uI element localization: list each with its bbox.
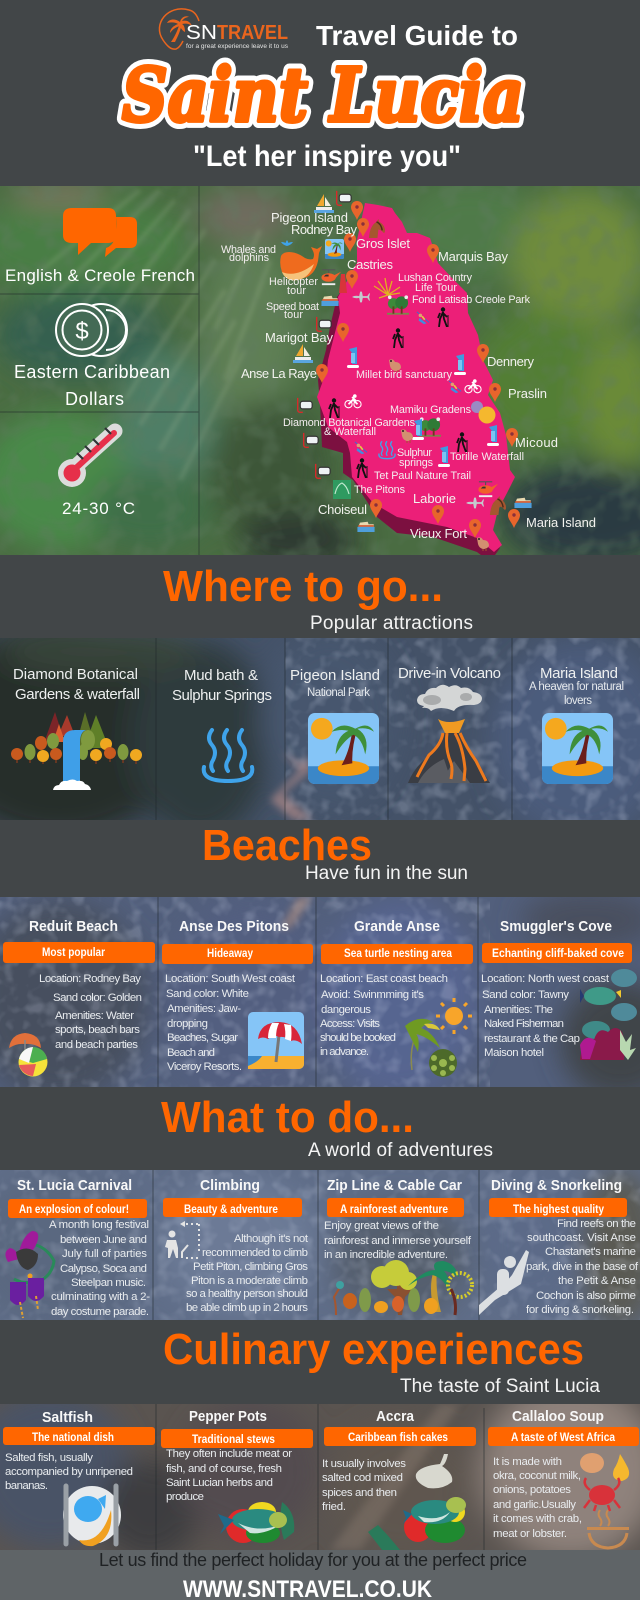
island of Saint Lucia	[317, 203, 515, 552]
attraction: Mud bath and Sulphur Springs: Sulphur Springs	[172, 687, 272, 704]
section heading: Beaches: Beaches	[202, 821, 372, 870]
map labels: Marquis Bay	[438, 249, 508, 264]
card: Grande Anse: Avoid: Swinmming it's	[321, 989, 424, 1001]
panel: beaches	[0, 890, 640, 1100]
card: Diving and Snorkeling: southcoast. Visit Anse	[527, 1232, 636, 1244]
photo background: water	[0, 638, 640, 820]
map labels: Fond Latisab Creole Park	[412, 294, 531, 306]
language fact	[5, 208, 195, 285]
icon: whale	[280, 240, 322, 280]
icon: sun, palm and turtle	[405, 998, 472, 1077]
map labels: Vieux Fort	[410, 526, 467, 541]
card: Climbing: Petit Piton, climbing Gros	[193, 1261, 308, 1273]
card: Reduit Beach: Amenities: Water	[55, 1010, 134, 1022]
card: Reduit Beach	[3, 918, 155, 1076]
map labels: Helicopter	[269, 276, 318, 288]
card: Diving and Snorkeling: the Petit & Anse	[558, 1275, 636, 1287]
card: Anse Des Pitons	[162, 918, 313, 1073]
map labels: Mamiku Gradens	[390, 404, 472, 416]
card: Accra	[322, 1408, 476, 1550]
temperature fact	[58, 428, 135, 518]
card: Climbing: Although it's not	[234, 1233, 309, 1245]
logo: SN Travel: for a great experience leave it to us	[186, 43, 289, 50]
icon: beach umbrella	[248, 1012, 304, 1069]
card: Reduit Beach: Sand color: Golden	[53, 992, 142, 1004]
icon: parasol and beach ball	[9, 1033, 48, 1076]
section heading: What to do	[161, 1093, 493, 1161]
currency fact: $	[75, 318, 89, 345]
card: Smuggler's Cove: restaurant & the Cap	[484, 1033, 580, 1045]
tagline: "Let her inspire you"	[193, 140, 461, 173]
card: Reduit Beach: sports, beach bars	[55, 1024, 140, 1036]
map pins	[316, 201, 520, 538]
card: Pepper Pots: produce	[166, 1491, 204, 1503]
card: Diving and Snorkeling: Cochon is also pirme	[536, 1290, 636, 1302]
icon: carnival masks	[5, 1231, 54, 1318]
card: Callaloo Soup: and garlic.Usually	[493, 1499, 576, 1511]
card: Pepper Pots: fish, and of course, fresh	[166, 1463, 282, 1475]
card: Diving and Snorkeling: park, dive in the base of	[526, 1261, 639, 1273]
key facts dividers	[0, 186, 199, 555]
map labels: dolphins	[229, 252, 270, 264]
card: Climbing	[163, 1177, 309, 1314]
logo: SN Travel	[159, 9, 289, 50]
card: Saltfish	[3, 1409, 155, 1546]
card: Pepper Pots: Traditional stews	[192, 1432, 275, 1446]
attraction: Pigeon Island: National Park	[307, 687, 370, 699]
card: Zip Line and Cable Car: rainforest and inmerse yourself	[324, 1235, 472, 1247]
card: Pepper Pots: They often include meat or	[166, 1448, 292, 1460]
card: St. Lucia Carnival: culminating with a 2-	[51, 1291, 150, 1303]
panel: culinary experiences	[0, 1380, 640, 1560]
icon: volcano	[408, 685, 490, 783]
map labels: springs	[399, 457, 434, 469]
card: St. Lucia Carnival: A month long festival	[49, 1219, 149, 1231]
card: Pepper Pots	[161, 1408, 313, 1543]
map labels: Dennery	[487, 354, 534, 369]
map labels: Millet bird sanctuary	[356, 369, 453, 381]
attraction: Pigeon Island	[290, 667, 380, 784]
card: Grande Anse	[320, 918, 473, 1077]
card: Zip Line and Cable Car: Enjoy great views of the	[324, 1220, 439, 1232]
card: St. Lucia Carnival: St. Lucia Carnival	[17, 1177, 132, 1194]
card: Anse Des Pitons: Amenities: Jaw-	[167, 1003, 241, 1015]
header	[122, 9, 524, 173]
map labels: Maria Island	[526, 515, 596, 530]
card: Reduit Beach: Most popular	[42, 945, 105, 959]
card: Anse Des Pitons: Hideaway	[207, 946, 253, 960]
map labels: & Waterfall	[324, 426, 376, 438]
section heading: Beaches: Have fun in the sun	[305, 863, 468, 884]
icon: the Pitons	[333, 480, 351, 499]
card: Grande Anse: in advance.	[320, 1046, 369, 1058]
map labels: Micoud	[515, 435, 558, 450]
card: Grande Anse: Access: Visits	[320, 1018, 380, 1030]
card: Diving and Snorkeling: for diving & snorkeling.	[526, 1304, 634, 1316]
photo background: tropical leaves	[0, 180, 640, 570]
heading: Travel Guide to: Travel Guide to	[316, 20, 518, 51]
card: Grande Anse: Location: East coast beach	[320, 973, 448, 985]
card: Smuggler's Cove: Echanting cliff-baked cove	[492, 946, 624, 960]
title: Saint Lucia: Saint Lucia	[122, 53, 524, 139]
panel: popular attractions	[0, 638, 640, 820]
card: Zip Line and Cable Car: in an incredible adventure.	[324, 1249, 448, 1261]
card: Anse Des Pitons: dropping	[167, 1018, 208, 1030]
logo: SN Travel: SN	[186, 22, 217, 44]
map labels: Choiseul	[318, 502, 367, 517]
section heading: Where to go: Where to go...	[163, 562, 443, 611]
attraction: Mud bath and Sulphur Springs: Mud bath &	[184, 667, 258, 684]
icon: coins	[56, 304, 127, 356]
card: Anse Des Pitons: Beach and	[167, 1047, 215, 1059]
card: Saltfish: Saltfish	[42, 1409, 93, 1426]
card: Diving and Snorkeling: The highest quality	[513, 1202, 604, 1216]
card: Smuggler's Cove: Smuggler's Cove	[500, 918, 612, 935]
card: Diving and Snorkeling: Diving & Snorkeling	[491, 1177, 622, 1194]
card: Accra: spices and then	[322, 1487, 397, 1499]
column dividers	[156, 1404, 484, 1550]
icon: hot spring	[204, 730, 252, 781]
title: Saint Lucia: Saint Lucia	[122, 53, 524, 139]
footer	[0, 1550, 640, 1600]
icon: palm island	[542, 713, 613, 784]
card: Anse Des Pitons: Anse Des Pitons	[179, 918, 289, 935]
footer: Let us find the perfect holiday for you at the perfect price	[99, 1550, 527, 1570]
icon: hiker on trail	[165, 1221, 199, 1258]
photo background	[0, 1380, 640, 1560]
section heading: Culinary experiences: Culinary experiences	[163, 1325, 584, 1374]
map labels: Praslin	[508, 386, 547, 401]
icon: thermometer	[58, 428, 115, 487]
map icons	[280, 191, 532, 551]
map labels: Whales and	[221, 244, 276, 256]
card: Smuggler's Cove: Location: North west coast	[481, 973, 610, 985]
card: Accra: fried.	[322, 1501, 346, 1513]
card: Diving and Snorkeling: Find reefs on the	[557, 1218, 636, 1230]
map labels: Torille Waterfall	[450, 451, 524, 463]
card: Anse Des Pitons: Beaches, Sugar	[167, 1032, 238, 1044]
card: St. Lucia Carnival: between June and	[60, 1234, 147, 1246]
map labels: Anse La Raye	[241, 366, 317, 381]
photo background: water	[0, 890, 640, 1100]
section heading: What to do: What to do...	[161, 1093, 414, 1142]
attraction: Diamond Botanical Gardens: Diamond Botanical	[13, 666, 138, 683]
card: Pepper Pots: Pepper Pots	[189, 1408, 267, 1425]
card: Callaloo Soup: Callaloo Soup	[512, 1408, 604, 1425]
card: Callaloo Soup: onions, potatoes	[493, 1484, 571, 1496]
card: Grande Anse: should be booked	[320, 1032, 396, 1044]
currency fact: Dollars	[65, 389, 124, 409]
card: Callaloo Soup: okra, coconut milk,	[493, 1470, 581, 1482]
icon: scuba diver	[479, 1250, 529, 1315]
panel: what to do	[0, 1170, 640, 1330]
attraction: Pigeon Island: Pigeon Island	[290, 667, 380, 684]
card: St. Lucia Carnival: Calypso, Soca and	[60, 1263, 147, 1275]
icon: tropical fish and coral	[580, 969, 637, 1060]
card: St. Lucia Carnival: An explosion of colour!	[19, 1202, 129, 1216]
photo background	[0, 1170, 640, 1330]
section heading: Culinary experiences	[163, 1325, 600, 1397]
attraction: Diamond Botanical Gardens: Gardens & waterfall	[15, 686, 140, 703]
map labels: Tet Paul Nature Trail	[374, 470, 471, 482]
icon: speech bubbles	[63, 208, 137, 257]
icon: garlic, fish and peppers	[368, 1454, 466, 1550]
card: Smuggler's Cove: Amenities: The	[484, 1004, 553, 1016]
card: Callaloo Soup: It is made with	[493, 1456, 562, 1468]
icon: palm island	[308, 713, 379, 784]
card: Saltfish: accompanied by unripened	[5, 1466, 133, 1478]
card: St. Lucia Carnival: Steelpan music.	[71, 1277, 146, 1289]
map labels: Lushan Country	[398, 272, 473, 284]
icon: flowers	[471, 401, 496, 424]
card: Smuggler's Cove: Sand color: Tawny	[482, 989, 569, 1001]
attraction: Maria Island: lovers	[564, 695, 592, 707]
section heading: Beaches	[202, 821, 468, 884]
currency fact	[14, 304, 170, 409]
map labels: Life Tour	[415, 282, 457, 294]
map labels: Gros Islet	[356, 236, 410, 251]
column dividers	[156, 638, 512, 820]
card: Accra: Accra	[376, 1408, 415, 1425]
card: St. Lucia Carnival: day costume parade.	[51, 1306, 149, 1318]
card: Grande Anse: Grande Anse	[354, 918, 440, 935]
map labels: Diamond Botanical Gardens	[283, 417, 416, 429]
card: Zip Line and Cable Car: A rainforest adventure	[340, 1202, 448, 1216]
card: Anse Des Pitons: Viceroy Resorts.	[167, 1061, 242, 1073]
card: Grande Anse: dangerous	[321, 1004, 371, 1016]
attraction: Diamond Botanical Gardens	[11, 666, 142, 790]
card: Callaloo Soup: A taste of West Africa	[511, 1430, 615, 1444]
section heading: Where to go: Popular attractions	[310, 613, 473, 634]
attraction: Mud bath and Sulphur Springs	[172, 667, 272, 781]
card: Reduit Beach: Location: Rodney Bay	[39, 973, 141, 985]
map labels: The Pitons	[354, 484, 406, 496]
card: Diving and Snorkeling	[479, 1177, 639, 1316]
section heading: Culinary experiences: The taste of Saint Lucia	[400, 1376, 600, 1397]
card: Zip Line and Cable Car: Zip Line & Cable Car	[327, 1177, 462, 1194]
card: Callaloo Soup: meat or lobster.	[493, 1528, 567, 1540]
icon: forest and waterfall	[11, 712, 142, 790]
attraction: Drive-in Volcano	[398, 665, 501, 783]
card: Climbing: Beauty & adventure	[184, 1202, 278, 1216]
card: Smuggler's Cove: Naked Fisherman	[484, 1018, 564, 1030]
map labels: Marigot Bay	[265, 330, 334, 345]
map labels: Laborie	[413, 491, 456, 506]
map labels	[221, 210, 596, 541]
map labels: Castries	[347, 257, 394, 272]
map labels: Pigeon Island	[271, 210, 348, 225]
card: Smuggler's Cove: Maison hotel	[484, 1047, 544, 1059]
icon: plant	[374, 278, 400, 298]
column dividers	[158, 897, 478, 1087]
card: St. Lucia Carnival	[5, 1177, 150, 1318]
card: Saltfish: bananas.	[5, 1480, 48, 1492]
map labels: tour	[287, 285, 306, 297]
section heading: Where to go	[163, 562, 473, 634]
card: Smuggler's Cove	[481, 918, 637, 1060]
card: Climbing: so a healthy person should	[186, 1288, 308, 1300]
card: Pepper Pots: Saint Lucian herbs and	[166, 1477, 273, 1489]
card: Anse Des Pitons: Location: South West coast	[165, 973, 296, 985]
card: Accra: salted cod mixed	[322, 1472, 403, 1484]
column dividers	[153, 1170, 479, 1320]
icon: fish and banana on plate	[63, 1486, 121, 1546]
card: Climbing: recommended to climb	[202, 1247, 308, 1259]
map labels: Sulphur	[397, 447, 432, 459]
card: Accra: Caribbean fish cakes	[348, 1430, 448, 1444]
attraction: Maria Island: Maria Island	[540, 665, 618, 682]
card: St. Lucia Carnival: July full of parties	[62, 1248, 147, 1260]
attraction: Maria Island: A heaven for natural	[529, 681, 624, 693]
card: Saltfish: Salted fish, usually	[5, 1452, 93, 1464]
card: Zip Line and Cable Car	[324, 1177, 472, 1315]
card: Grande Anse: Sea turtle nesting area	[344, 946, 452, 960]
card: Climbing: be able climb up in 2 hours	[186, 1302, 308, 1314]
icon: rainforest trees	[334, 1260, 472, 1315]
attraction: Drive-in Volcano: Drive-in Volcano	[398, 665, 501, 682]
card: Accra: It usually involves	[322, 1458, 406, 1470]
card: Callaloo Soup	[488, 1408, 639, 1548]
attraction: Maria Island	[529, 665, 624, 784]
card: Climbing: Climbing	[200, 1177, 260, 1194]
icon: potato, pear, crab, soup bowl	[580, 1453, 629, 1548]
section heading: What to do: A world of adventures	[308, 1140, 493, 1161]
icon: red lighthouse	[339, 274, 347, 293]
card: Reduit Beach: and beach parties	[55, 1039, 138, 1051]
currency fact: Eastern Caribbean	[14, 362, 170, 382]
temperature fact: 24-30 °C	[62, 499, 135, 518]
map labels: Speed boat	[266, 301, 319, 313]
card: Reduit Beach: Reduit Beach	[29, 918, 118, 935]
map labels: Rodney Bay	[291, 222, 358, 237]
icon: fish and peppers	[218, 1502, 294, 1543]
card: Anse Des Pitons: Sand color: White	[166, 988, 249, 1000]
card: Callaloo Soup: it comes with crab,	[493, 1513, 582, 1525]
card: Climbing: Piton is a moderate climb	[191, 1275, 308, 1287]
language fact: English & Creole French	[5, 266, 195, 285]
card: Saltfish: The national dish	[32, 1430, 114, 1444]
island shadow	[318, 293, 500, 555]
card: Diving and Snorkeling: Chastanet's marine	[545, 1246, 636, 1258]
logo: SN Travel: TRAVEL	[217, 22, 288, 44]
panel: map and key facts	[0, 180, 640, 570]
map labels: tour	[284, 309, 303, 321]
